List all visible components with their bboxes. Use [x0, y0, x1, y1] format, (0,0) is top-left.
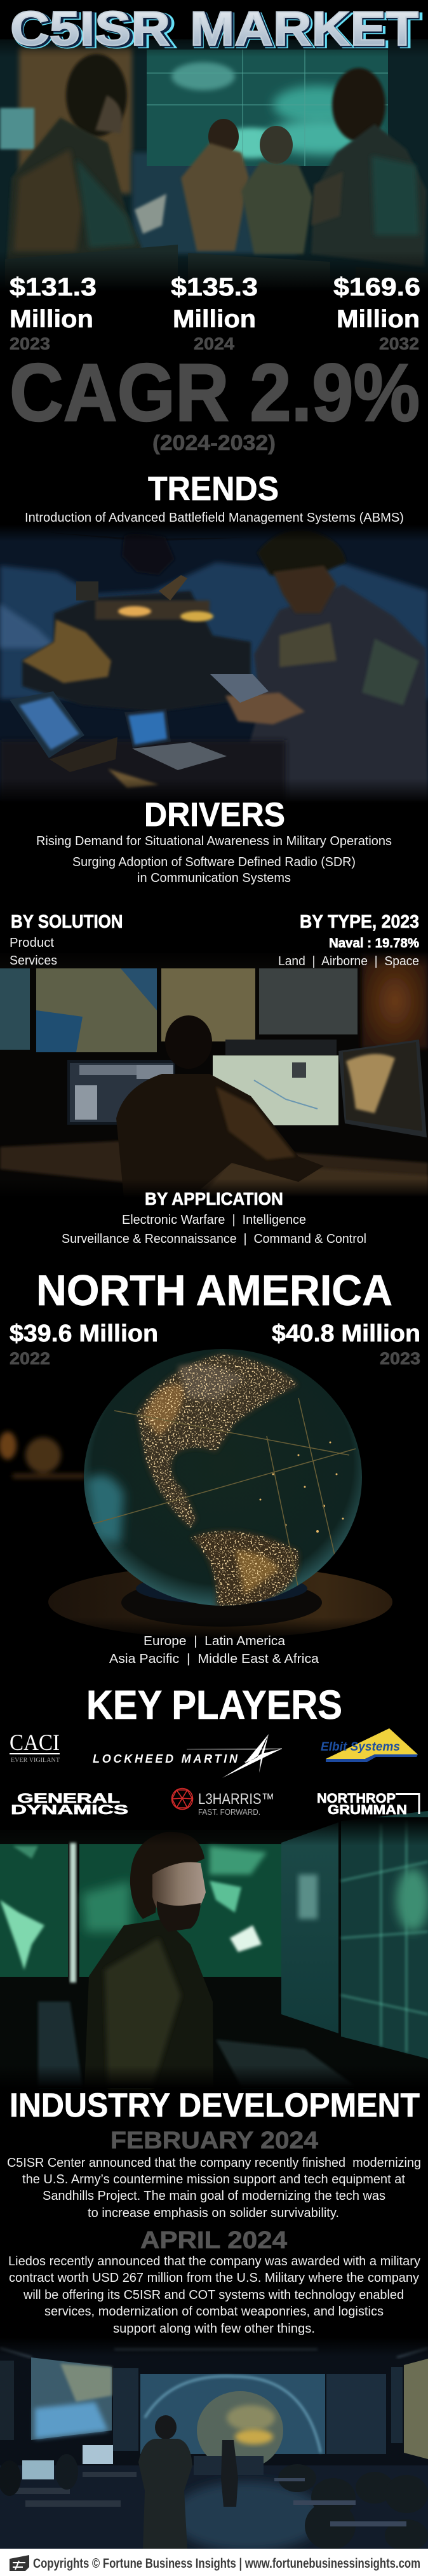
photo: soldier with tablet and tank [0, 525, 428, 804]
development text: april: support along with few other things. [113, 2322, 315, 2336]
development text: april: services, modernization of combat weaponries, and logistics [44, 2305, 384, 2319]
stat: 2023 market size: 2023 [10, 334, 50, 353]
left tablet device [10, 691, 117, 772]
logo: L3Harris: L3HARRIS™ [198, 1791, 274, 1808]
development text: february: C5ISR Center announced that the company recently finished modernizing [7, 2156, 421, 2170]
globe stand ring [121, 1578, 322, 1627]
scattered ocean lights [259, 1441, 344, 1533]
development text: february: the U.S. Army’s countermine mission support and tech equipment at [22, 2173, 405, 2186]
stat: north america 2022: $39.6 Million [10, 1320, 158, 1347]
ceiling [0, 2348, 428, 2357]
main globe screen [140, 2374, 325, 2470]
heading: key players: KEY PLAYERS [86, 1682, 342, 1728]
trend text: Introduction of Advanced Battlefield Management Systems (ABMS) [25, 511, 404, 525]
right desks [274, 2478, 406, 2526]
tablet [210, 674, 269, 703]
stat: 2032 market size: $169.6 [333, 273, 420, 301]
title: C5ISR [10, 2, 170, 56]
regions text: Europe | Latin America [144, 1634, 286, 1648]
left monitor [67, 1060, 175, 1125]
stat: 2024 market size: Million [173, 306, 256, 333]
stat: 2032 market size: Million [337, 306, 420, 333]
title: C5ISR [12, 4, 176, 58]
photo: illuminated globe [0, 1349, 428, 1639]
background lamps [0, 1432, 86, 1478]
stat: 2032 market size: 2032 [379, 334, 419, 353]
right angled screens [281, 1811, 428, 2059]
title [10, 2, 422, 58]
heading: drivers: DRIVERS [144, 796, 285, 834]
logo: CACI: CACI [10, 1730, 60, 1755]
heading: north america: NORTH AMERICA [36, 1266, 392, 1315]
right screen [404, 2359, 428, 2459]
panel: by solution: Product [10, 936, 54, 950]
officer [84, 1832, 213, 2087]
stat: 2024 market size: 2024 [194, 334, 234, 353]
presenter desk [194, 2456, 264, 2475]
foreground soldier [138, 2415, 192, 2549]
title: C5ISR [12, 3, 173, 57]
panel: by application: Surveillance & Reconnaissance | Command & Control [62, 1232, 366, 1246]
desk monitors [5, 245, 428, 287]
globe [84, 1349, 362, 1608]
stat: north america 2023: $40.8 Million [272, 1320, 420, 1347]
development text: february [7, 2156, 421, 2220]
helicopter [48, 532, 251, 575]
north america landmass [137, 1353, 298, 1528]
panel: by application: BY APPLICATION [145, 1189, 283, 1209]
driver text: software defined radio [72, 855, 356, 885]
stat: north america 2023 [272, 1320, 420, 1368]
driver text: software defined radio: in Communication Systems [137, 871, 291, 885]
photo: command room soldiers [0, 25, 428, 292]
panel: by solution [10, 912, 123, 968]
logo: CACI [10, 1730, 60, 1764]
photo: command classroom [0, 2337, 428, 2551]
stat: 2024 market size [171, 273, 258, 353]
development text: february: Sandhills Project. The main goal of modernizing the tech was [43, 2189, 385, 2203]
left map screen [0, 1844, 68, 1977]
panel: by solution: Services [10, 954, 57, 968]
development text: april: will be offering its C5ISR and COT systems with technology enabled [23, 2288, 404, 2302]
panel: by solution: BY SOLUTION [11, 912, 123, 932]
screen divider [70, 1843, 76, 1983]
logo: General Dynamics [11, 1791, 128, 1817]
date: april 2024: APRIL 2024 [140, 2227, 287, 2254]
logo: General Dynamics: DYNAMICS [11, 1803, 128, 1817]
photo: officer and green map screens [0, 1811, 428, 2088]
panel: by type: BY TYPE, 2023 [300, 912, 419, 932]
development text: february: to increase emphasis on solider survivability. [88, 2206, 339, 2220]
title: MARKET [190, 2, 418, 56]
laptop [124, 708, 227, 770]
right monitor [338, 1040, 427, 1137]
logo: Fortune Business Insights [10, 2555, 29, 2571]
soldier [225, 529, 428, 802]
logo: L3Harris: FAST. FORWARD. [198, 1807, 260, 1817]
desk [0, 1141, 428, 1196]
left soldier [6, 54, 166, 267]
foreground keyboard [216, 2040, 356, 2087]
stat: north america 2022: 2022 [10, 1349, 50, 1368]
city lights [137, 1353, 299, 1608]
development text: april: Liedos recently announced that the company was awarded with a military [8, 2254, 420, 2268]
logo: L3Harris [171, 1788, 274, 1817]
presenter [221, 2440, 238, 2507]
photo: operator at monitors [0, 948, 428, 1198]
stat: 2032 market size [333, 273, 420, 353]
logo: Northrop Grumman: GRUMMAN [328, 1803, 407, 1817]
left screen [31, 2357, 112, 2440]
logo: Elbit Systems [321, 1728, 418, 1762]
panel: by type: Land | Airborne | Space [278, 954, 419, 968]
operator silhouette [116, 1015, 324, 1198]
title: MARKET [192, 4, 422, 58]
date: february 2024: FEBRUARY 2024 [110, 2127, 318, 2154]
stat: 2023 market size: Million [10, 306, 93, 333]
heading: trends: TRENDS [148, 470, 279, 508]
panel: by type: Naval : 19.78% [329, 936, 419, 951]
upper monitor strip [225, 1040, 337, 1055]
centre monitor [213, 1055, 338, 1125]
right soldier [311, 68, 427, 267]
wall screens [0, 968, 358, 1052]
stat: north america 2022 [10, 1320, 158, 1368]
side panels [0, 2361, 403, 2454]
development text: april [8, 2254, 420, 2336]
armoured vehicle [22, 575, 251, 712]
stat: 2023 market size [10, 273, 97, 353]
regions text [109, 1634, 319, 1666]
driver text: software defined radio: Surging Adoption of Software Defined Radio (SDR) [72, 855, 356, 869]
CAGR period: (2024-2032) [152, 431, 276, 454]
globe stand disc [48, 1566, 392, 1638]
logo: Northrop Grumman: NORTHROP [317, 1791, 396, 1806]
stat: north america 2023: 2023 [380, 1349, 420, 1368]
logo: Lockheed Martin: LOCKHEED MARTIN [93, 1752, 238, 1765]
stat: 2023 market size: $131.3 [10, 273, 97, 301]
wall map screen [147, 50, 388, 166]
title: MARKET [192, 3, 419, 57]
centre soldiers [181, 119, 312, 254]
regions text: Asia Pacific | Middle East & Africa [109, 1652, 319, 1666]
footer bar [0, 2549, 428, 2576]
logo: Elbit Systems: Elbit Systems [321, 1740, 400, 1754]
development text: april: contract worth USD 267 million from the U.S. Military where the company [9, 2271, 419, 2285]
left desks and monitors [0, 2445, 137, 2507]
logo: Northrop Grumman [317, 1791, 419, 1817]
logo: Lockheed Martin [93, 1734, 282, 1778]
panel: by type [278, 912, 419, 968]
stat: 2024 market size: $135.3 [171, 273, 258, 301]
floor [0, 2465, 428, 2549]
driver text: situational awareness: Rising Demand for Situational Awareness in Military Operations [36, 834, 392, 848]
panel: by application: Electronic Warfare | Intelligence [122, 1213, 306, 1227]
panel: by application [62, 1189, 366, 1246]
centre map screen [79, 1844, 281, 1977]
logo: General Dynamics: GENERAL [17, 1791, 120, 1806]
right students [278, 2464, 428, 2551]
logo: CACI: EVER VIGILANT [11, 1757, 60, 1764]
